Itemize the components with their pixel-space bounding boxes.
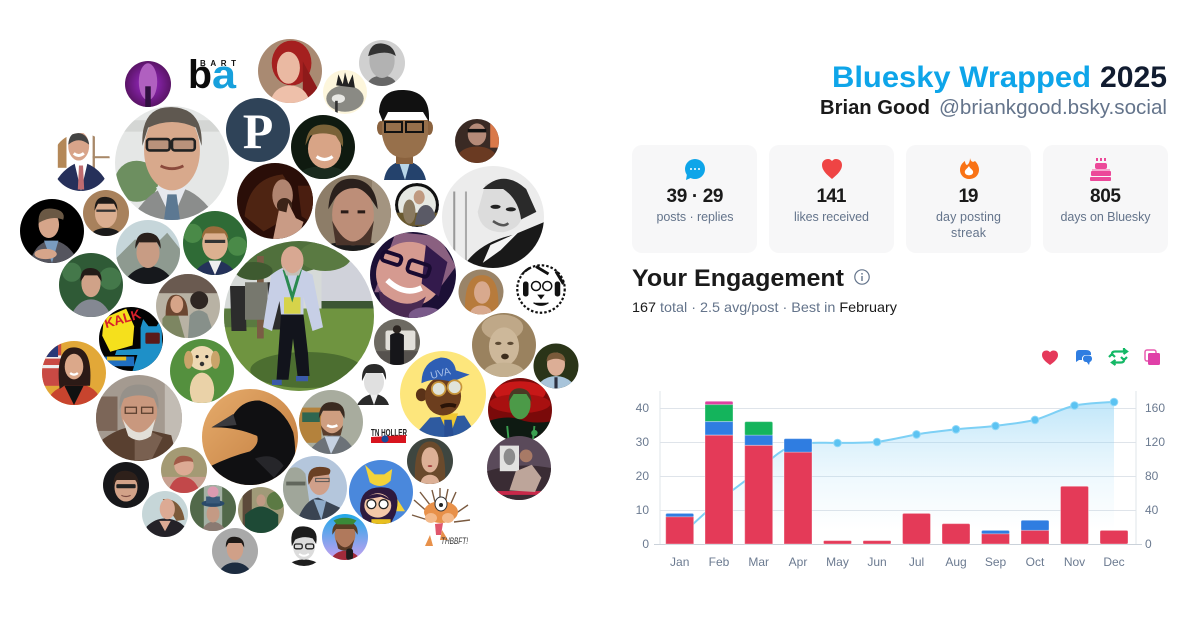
avatar: crow on orange sky [202,389,298,485]
month labels: Nov [1064,555,1085,569]
bar: Jul [902,513,930,544]
avatar: man with coyote [395,183,439,227]
stat value: 805 [1090,186,1121,207]
right axis labels: 120 [1145,435,1165,449]
avatar: man in green foliage [59,253,123,317]
avatar: smiling man, bookshelves [299,390,363,454]
avatar: sepia statue head [472,313,536,377]
avatar: bearded man, beige wall [315,175,391,251]
avatar: man with stacked hats [190,485,236,531]
right axis labels [1145,401,1165,551]
stat label: days on Bluesky [1060,210,1151,224]
avatar: Bill the Cat illustration: THBBFT! [441,536,468,546]
right axis labels: 40 [1145,503,1159,517]
avatar: punk walrus illustration [323,70,367,114]
left axis labels: 0 [642,537,649,551]
stat card: posts and replies [632,145,757,253]
logo: BART: a [212,53,237,97]
avatar: line drawing dog with headphones [516,264,566,314]
icon: flame [960,158,979,179]
panel: avatar cloud [20,39,578,574]
icon: reply [1076,350,1092,365]
stat card: day posting streak [906,145,1031,253]
avatar: large man with glasses, grey suit [115,106,229,220]
avatar: man in front of ivy [183,211,247,275]
cumulative markers [834,398,1118,447]
avatar: laughing man in suit [58,133,110,191]
month labels: May [826,555,849,569]
icon: repost [1109,348,1127,365]
bar: Nov [1060,486,1088,544]
avatar: green-faced figure in red room [488,378,552,442]
right axis labels: 160 [1145,401,1165,415]
icon: birthday cake [1090,158,1111,181]
legend icons [1042,348,1160,365]
avatar: woman in black top [142,491,188,537]
avatar: golden puppy [170,339,234,408]
icon: heart [822,159,842,179]
avatar: man with glasses, wood interior [83,190,129,236]
bar: Feb [705,401,733,544]
bar: Oct [1021,520,1049,544]
stat label line two: streak [951,226,987,240]
bar: Sep [982,530,1010,544]
bar: Aug [942,524,970,544]
icon: quote [1145,350,1160,365]
avatar: two women talking [156,274,220,338]
subtitle: name and handle [820,97,1167,119]
stat card: days on Bluesky [1043,145,1168,253]
month labels: Jan [670,555,689,569]
heading: Your Engagement: Your Engagement [632,265,844,292]
bar: Apr [784,439,812,544]
avatar: wrestling ring meme [487,436,551,500]
avatar: pixel art girl with pikachu [349,460,413,526]
logo: TN Holler [371,428,407,443]
title: 2025 [1100,61,1167,94]
month labels: Mar [748,555,769,569]
logo: BART: BART [200,59,236,68]
avatar: man with glasses, headphones [103,462,149,508]
icon: info [855,270,869,284]
avatar: black and white man with glasses [282,522,326,566]
stat value: 39 · 29 [666,186,724,207]
avatar: man with mountains [116,220,180,284]
right axis labels: 80 [1145,469,1159,483]
month labels [670,555,1125,569]
stat label: day posting [936,210,1001,224]
left axis labels: 40 [636,401,649,415]
logo: TN Holler: TN HOLLER [371,428,407,439]
subtitle: name and handle: Brian Good [820,97,930,119]
month labels: Apr [789,555,807,569]
left axis labels: 30 [636,435,649,449]
stat value: 19 [958,186,978,207]
bar: Jun [863,541,891,544]
bar: May [824,541,852,544]
month labels: Feb [709,555,730,569]
avatar: capitol and man [283,456,347,520]
bar: Jan [666,513,694,544]
avatar: congresswoman with flags [42,341,106,405]
subtitle: name and handle: @briankgood.bsky.social [939,97,1167,119]
left axis labels: 10 [636,503,649,517]
icon: like [1042,350,1058,365]
engagement chart [636,391,1165,569]
avatar: man in green sweatshirt [238,487,285,533]
bar: Mar [745,422,773,544]
avatar: baby in red [161,447,207,493]
month labels: Sep [985,555,1006,569]
avatar: cartoon man in UVA cap [400,351,486,437]
right axis labels: 0 [1145,537,1152,551]
month labels: Jul [909,555,924,569]
avatar: man in dark shirt, grey background [212,528,258,574]
month labels: Jun [867,555,887,569]
avatar: Bill the Cat illustration [412,488,470,546]
avatar: smiling man, dark background [291,115,355,179]
left axis labels: 20 [636,469,649,483]
avatar: woman with dark glasses [455,119,499,163]
avatar: man with tie, trees [534,344,578,388]
avatar: navy P logo [226,98,290,162]
avatar: cartoon man with glasses [377,90,433,180]
avatar: man speaking, black background [20,199,84,263]
avatar: grey portrait man [359,40,405,86]
cumulative line [680,402,1114,536]
logo: BART: b [188,53,212,97]
icon: speech bubble [685,159,705,180]
avatar: grey-bearded man in brown robe [96,375,182,461]
stat label: posts · replies [656,210,734,224]
avatar: woman with long hair, car interior [407,438,453,484]
logo: BART [188,53,237,97]
month labels: Dec [1103,555,1125,569]
gridlines and axes [654,391,1142,544]
avatar: man, beige van [374,319,420,365]
avatar: man with long dark hair [237,163,313,239]
left axis labels [636,401,649,551]
avatar: bearded man, gradient background [322,514,368,560]
avatar: KALK radio logo [99,306,163,371]
bar: Dec [1100,530,1128,544]
avatar: drawn man in suit, black and white [357,364,389,405]
avatar: woman with auburn hair [458,270,504,314]
month labels: Oct [1026,555,1045,569]
avatar: navy P logo: P [243,103,273,159]
cumulative area [680,402,1114,544]
stat card: likes received [769,145,894,253]
stat label: likes received [794,210,869,224]
avatar: purple-tinted man with glasses [370,232,456,324]
month labels: Aug [945,555,967,569]
avatar: purple abstract [125,61,171,107]
avatar: red-haired woman [258,39,322,103]
avatar: main photo, man with race bib on lawn [224,241,374,391]
avatar: black and white man in suit [442,166,544,268]
stat value: 141 [816,186,847,207]
title: Bluesky Wrapped [832,61,1091,94]
stacked bars [666,401,1128,544]
engagement summary: 167 total · 2.5 avg/post · Best in February [632,299,897,315]
